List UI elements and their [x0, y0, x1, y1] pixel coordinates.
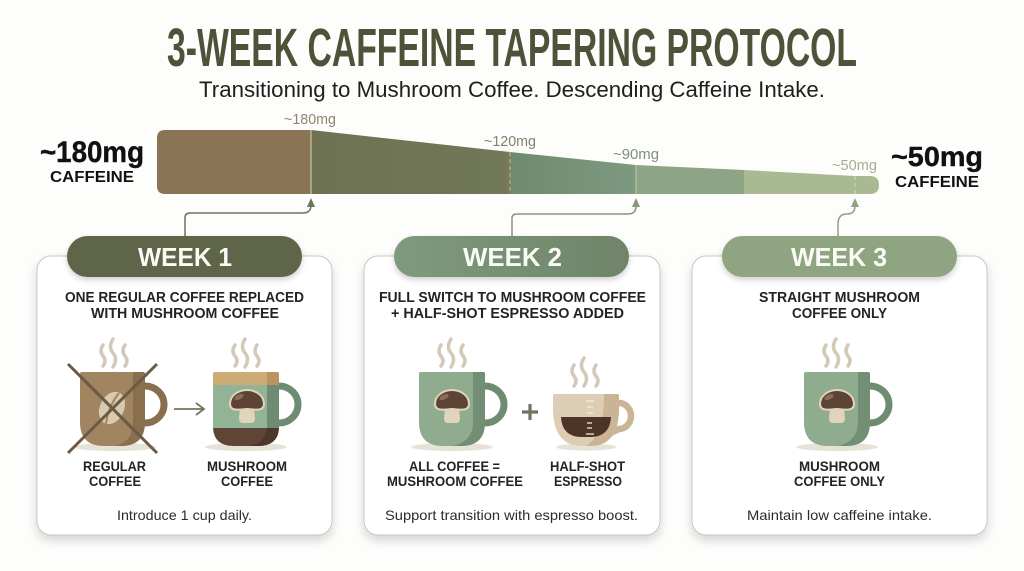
bar label: ~90mg: ~90mg [613, 147, 659, 163]
end caffeine label: ~50mg [891, 141, 983, 172]
icon: half-shot espresso cup [553, 358, 631, 450]
week 2 description: + HALF-SHOT ESPRESSO ADDED [391, 306, 624, 322]
panel: week 1 [37, 236, 332, 535]
week 1 heading pill: WEEK 1 [138, 242, 232, 272]
week 1 note: Introduce 1 cup daily. [117, 507, 252, 523]
label: half-shot espresso: HALF-SHOT [550, 459, 626, 474]
end caffeine label: CAFFEINE [895, 174, 979, 191]
week 2 description [379, 290, 646, 322]
subtitle: Transitioning to Mushroom Coffee. Descending Caffeine Intake. [199, 77, 825, 102]
week 3 heading pill: WEEK 3 [791, 242, 887, 272]
week 1 description: WITH MUSHROOM COFFEE [91, 306, 279, 322]
label: regular coffee [83, 459, 146, 489]
icon: mushroom coffee mug [796, 339, 889, 451]
week 3 description: COFFEE ONLY [792, 306, 887, 322]
end caffeine label [891, 141, 983, 191]
label: mushroom coffee only: MUSHROOM [799, 459, 880, 474]
week 2 description: FULL SWITCH TO MUSHROOM COFFEE [379, 290, 646, 306]
label: half-shot espresso: ESPRESSO [554, 474, 622, 489]
start caffeine label: ~180mg [40, 136, 144, 169]
arrow: week 3 to bar [838, 198, 859, 238]
start caffeine label [40, 136, 144, 186]
week 1 description: ONE REGULAR COFFEE REPLACED [65, 290, 304, 306]
week 3 description: STRAIGHT MUSHROOM [759, 290, 920, 306]
arrow: week 2 to bar [512, 198, 640, 238]
icon: mushroom coffee mug [205, 339, 298, 451]
label: mushroom coffee [207, 459, 287, 489]
label: mushroom coffee only [794, 459, 885, 489]
bar label: ~180mg: ~180mg [284, 112, 336, 128]
label: all coffee = mushroom coffee: MUSHROOM COFFEE [387, 474, 523, 489]
week 3 note: Maintain low caffeine intake. [747, 507, 932, 523]
arrow: week 1 to bar [185, 198, 315, 238]
tapering caffeine bar [157, 130, 879, 194]
label: all coffee = mushroom coffee [387, 459, 523, 489]
label: regular coffee: COFFEE [89, 474, 141, 489]
week 2 note: Support transition with espresso boost. [385, 507, 638, 523]
start caffeine label: CAFFEINE [50, 169, 134, 186]
bar label: ~50mg: ~50mg [832, 158, 877, 174]
week 2 heading pill [394, 236, 629, 277]
plus sign [522, 404, 538, 420]
label: mushroom coffee: MUSHROOM [207, 459, 287, 474]
week 3 heading pill [722, 236, 957, 277]
week 1 heading pill [67, 236, 302, 277]
bar label: ~120mg: ~120mg [484, 134, 536, 150]
label: all coffee = mushroom coffee: ALL COFFEE = [409, 459, 500, 474]
panel: week 2 [364, 236, 660, 535]
label: regular coffee: REGULAR [83, 459, 146, 474]
label: half-shot espresso [550, 459, 626, 489]
panel: week 3 [692, 236, 987, 535]
arrow: regular to mushroom [174, 403, 204, 415]
icon: regular coffee crossed out [68, 339, 164, 453]
week 2 heading pill: WEEK 2 [463, 242, 562, 272]
week 1 description [65, 290, 304, 322]
label: mushroom coffee: COFFEE [221, 474, 273, 489]
week 3 description [759, 290, 920, 322]
label: mushroom coffee only: COFFEE ONLY [794, 474, 885, 489]
icon: mushroom coffee mug [411, 339, 504, 451]
